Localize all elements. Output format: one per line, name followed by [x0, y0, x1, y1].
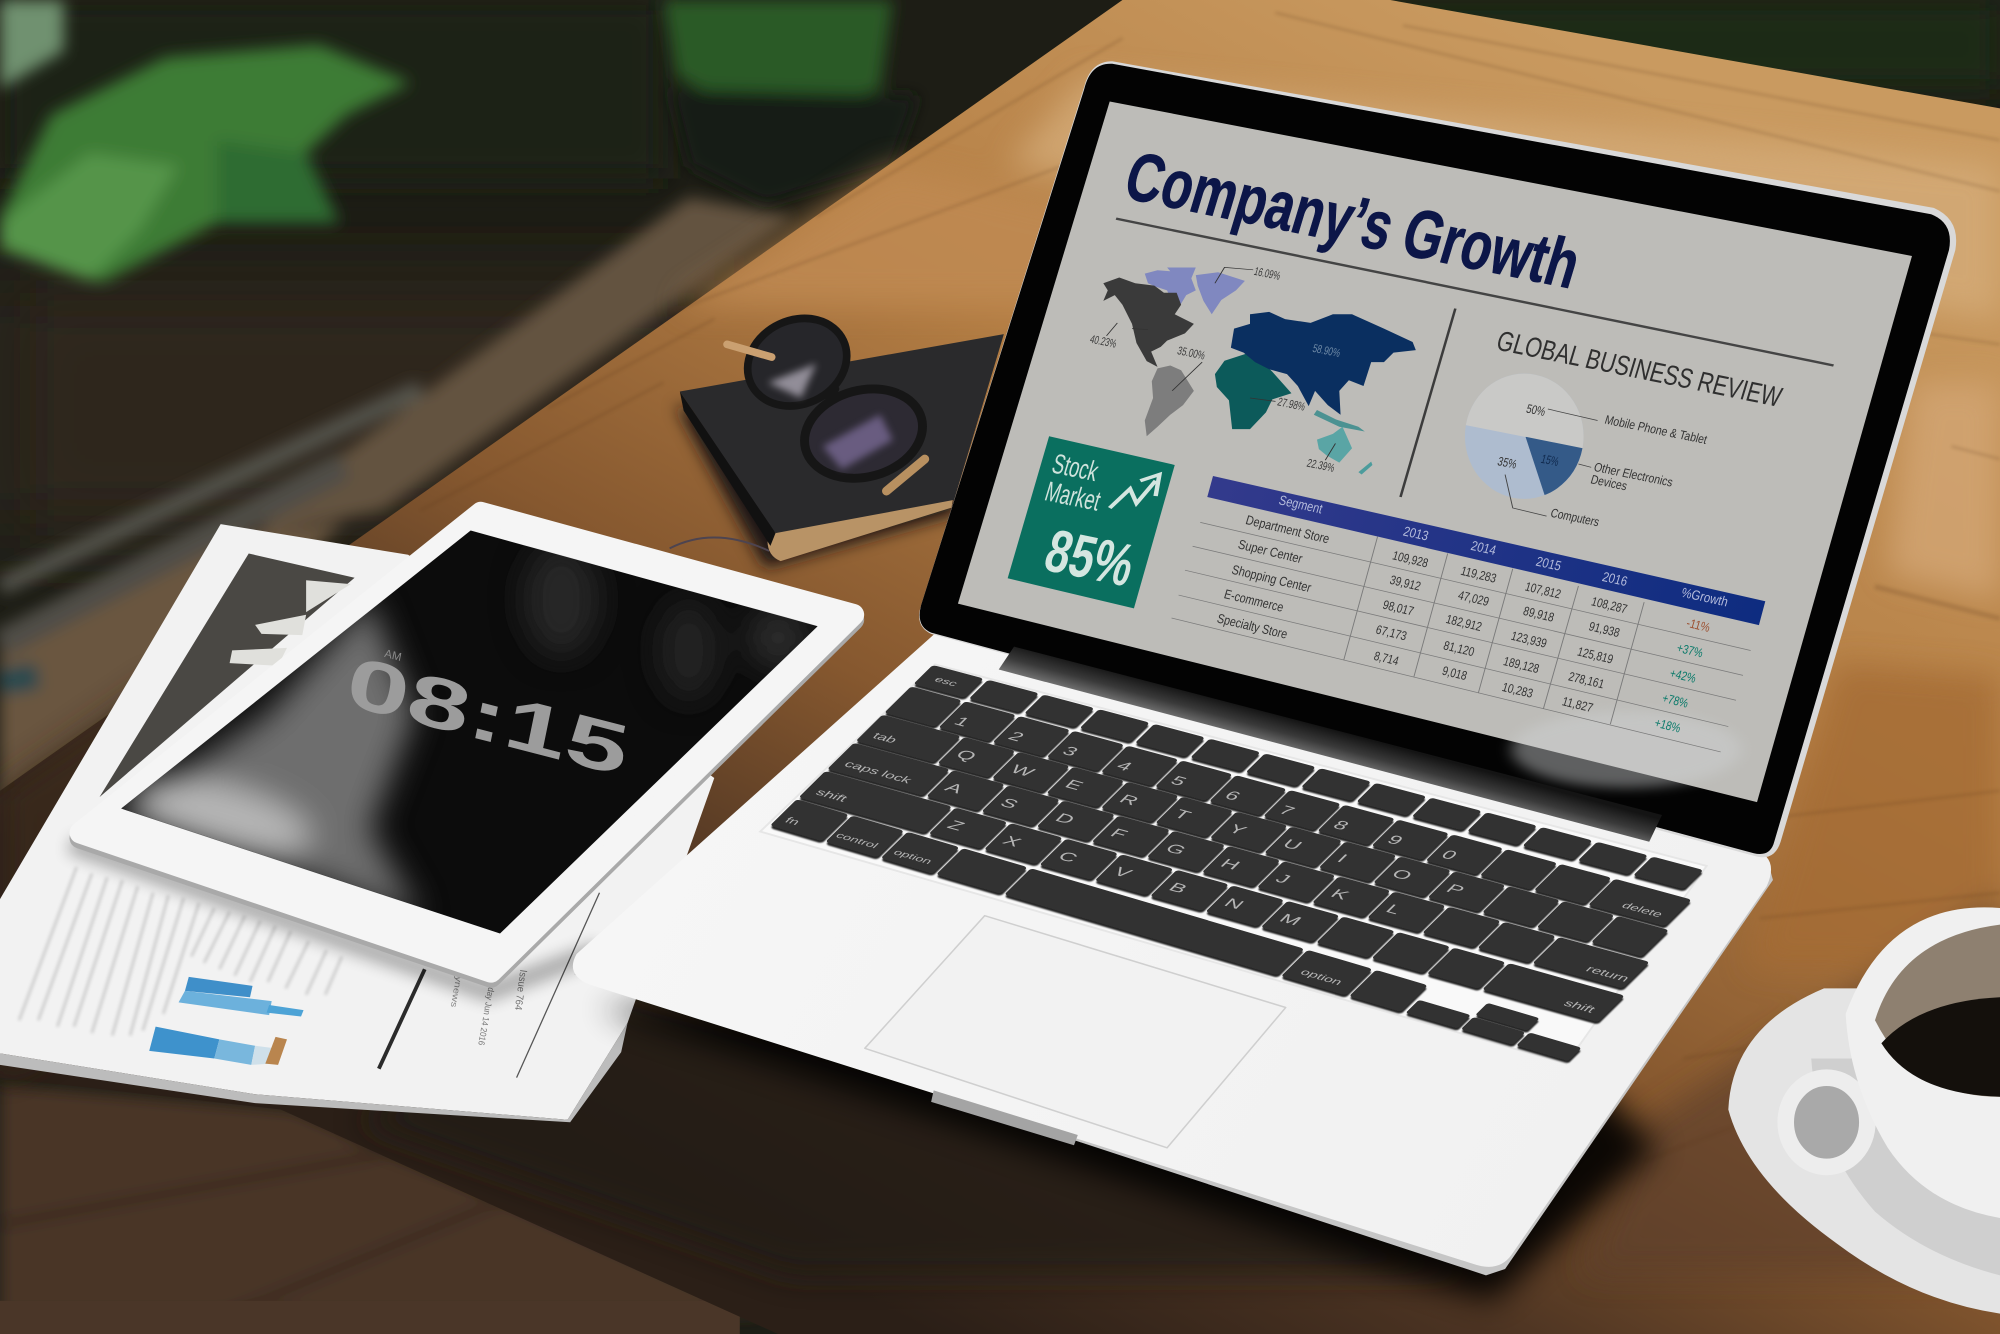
- pie chart: Devices: [1589, 473, 1629, 494]
- table values: 89,918: [1521, 605, 1556, 625]
- world map: 58.90%: [1311, 342, 1342, 360]
- pie chart: Mobile Phone & Tablet: [1603, 413, 1709, 447]
- pie chart: Computers: [1549, 507, 1601, 530]
- home key row: return: [1583, 963, 1633, 984]
- growth values: +37%: [1675, 641, 1705, 661]
- pie chart: 35%: [1496, 455, 1518, 472]
- trackpad: [865, 916, 1286, 1148]
- table values: 47,029: [1456, 589, 1491, 609]
- number key row: 0: [1438, 847, 1461, 862]
- home key row: A: [941, 780, 968, 796]
- title: Company’s Growth: [1117, 137, 1589, 303]
- laptop screen: [958, 101, 1912, 802]
- tablet: [70, 513, 853, 992]
- shift key row: B: [1165, 880, 1191, 896]
- qwerty key row: P: [1443, 881, 1469, 897]
- bottom key row: fn: [782, 815, 803, 827]
- table values: 91,938: [1587, 620, 1621, 640]
- world map: 16.09%: [1252, 265, 1282, 282]
- qwerty key row: R: [1116, 792, 1143, 808]
- home key row: H: [1217, 856, 1244, 872]
- number key row: 9: [1383, 832, 1407, 847]
- home key row: F: [1107, 826, 1132, 841]
- home key row: D: [1052, 810, 1079, 827]
- table header: Segment: [1277, 493, 1325, 517]
- tablet screen: [115, 531, 818, 934]
- row labels: Shopping Center: [1230, 563, 1313, 596]
- home key row: G: [1162, 841, 1190, 857]
- stone ledge: [0, 198, 793, 816]
- number key row: [884, 686, 1692, 926]
- divider: [1401, 309, 1455, 497]
- world map: [1089, 265, 1416, 475]
- qwerty key row: Y: [1225, 821, 1251, 837]
- shift key row: shift: [1561, 998, 1599, 1015]
- row labels: Department Store: [1244, 513, 1331, 547]
- shift key row: X: [999, 833, 1026, 849]
- home key row: [827, 743, 1650, 988]
- bottom key row: [770, 799, 1595, 1061]
- pie chart: [1465, 374, 1709, 530]
- world map: 35.00%: [1176, 344, 1207, 362]
- table values: 108,287: [1590, 595, 1629, 617]
- table values: 123,939: [1509, 630, 1548, 651]
- qwerty key row: Q: [952, 747, 981, 763]
- bottom key row: control: [833, 830, 881, 850]
- stock market panel: [1008, 436, 1175, 608]
- table header: 2015: [1534, 555, 1563, 574]
- cup handle: [1786, 1078, 1867, 1167]
- table values: 107,812: [1523, 580, 1562, 602]
- pie chart: 15%: [1539, 453, 1560, 469]
- row labels: Super Center: [1236, 537, 1304, 567]
- home key row: caps lock: [842, 758, 915, 785]
- growth values: -11%: [1685, 617, 1712, 635]
- table values: 125,819: [1576, 645, 1615, 667]
- growth values: +42%: [1668, 667, 1698, 686]
- qwerty key row: U: [1279, 836, 1306, 853]
- laptop hinge: [999, 647, 1662, 842]
- row labels: [1215, 513, 1331, 642]
- number key row: 8: [1329, 817, 1353, 833]
- clock time: 08:15: [340, 641, 636, 792]
- world map: 40.23%: [1089, 333, 1118, 350]
- laptop lid: [919, 61, 1956, 857]
- coffee cup and saucer: [1728, 907, 2000, 1314]
- table values: 98,017: [1381, 598, 1415, 619]
- news credit: dailynews: [449, 959, 467, 1009]
- data table: [1172, 476, 1765, 752]
- table values: 278,161: [1567, 670, 1606, 692]
- table values: 119,283: [1459, 564, 1498, 586]
- shift key row: V: [1110, 864, 1136, 880]
- qwerty key row: I: [1334, 851, 1352, 865]
- shift key row: M: [1276, 911, 1305, 928]
- title rule: [1116, 219, 1834, 365]
- qwerty key row: tab: [870, 731, 900, 745]
- saucer: [1728, 988, 2000, 1314]
- shift key row: N: [1221, 895, 1248, 912]
- number key row: 2: [1005, 729, 1028, 744]
- growth values: [1653, 617, 1712, 736]
- icon: rising arrow: [1110, 475, 1159, 508]
- table values: 39,912: [1388, 574, 1422, 594]
- stock market panel: 85%: [1038, 516, 1142, 599]
- pie chart: 50%: [1525, 402, 1547, 419]
- keyboard: [770, 665, 1703, 1061]
- table values: 9,018: [1440, 664, 1469, 684]
- glasses: [727, 302, 933, 491]
- newspapers: [0, 524, 714, 1122]
- issue line: Issue 764: [512, 969, 528, 1011]
- clock am label: AM: [383, 648, 402, 664]
- number key row: delete: [1619, 901, 1665, 919]
- world map: 22.39%: [1305, 456, 1336, 474]
- table values: 189,128: [1502, 655, 1541, 677]
- pie chart: Other Electronics: [1592, 461, 1674, 490]
- bar chart: [149, 977, 304, 1065]
- screen panel: [958, 101, 1912, 802]
- function key row: esc: [932, 675, 961, 688]
- qwerty key row: E: [1061, 777, 1087, 793]
- table values: 182,912: [1444, 613, 1483, 634]
- qwerty key row: O: [1388, 866, 1416, 883]
- date line: Monday Jun 14 2016: [476, 971, 499, 1046]
- bottom key row: option: [1298, 967, 1345, 987]
- growth values: +78%: [1660, 692, 1690, 711]
- table header: 2016: [1600, 570, 1629, 589]
- number key row: 3: [1059, 743, 1082, 759]
- number key row: 5: [1167, 773, 1191, 788]
- bottom key row: option: [891, 847, 935, 866]
- newspaper rule: [379, 969, 425, 1069]
- laptop base: [573, 631, 1773, 1275]
- stock market panel: Stock: [1049, 447, 1103, 487]
- laptop shadow: [599, 1008, 1658, 1301]
- home key row: L: [1382, 902, 1406, 917]
- world map: 27.98%: [1276, 395, 1307, 413]
- table header: [1207, 476, 1765, 625]
- laptop: [573, 61, 1956, 1301]
- home key row: S: [996, 795, 1023, 811]
- cup body: [1846, 907, 2000, 1218]
- row labels: Specialty Store: [1215, 611, 1289, 642]
- newspaper photo: [99, 553, 355, 797]
- number key row: 6: [1221, 788, 1245, 803]
- stock market panel: Market: [1042, 475, 1104, 517]
- keyboard well: [760, 664, 1707, 1064]
- shift key row: Z: [944, 818, 969, 833]
- growth values: +18%: [1653, 717, 1682, 736]
- foliage: [0, 0, 918, 283]
- qwerty key row: T: [1170, 807, 1195, 822]
- table header: %Growth: [1679, 586, 1730, 610]
- qwerty key row: [856, 715, 1669, 957]
- coffee: [1881, 997, 2000, 1097]
- shift key row: shift: [813, 787, 851, 804]
- home key row: J: [1272, 871, 1295, 886]
- table values: 109,928: [1391, 549, 1430, 571]
- table header: 2014: [1469, 539, 1498, 558]
- table values: 67,173: [1374, 623, 1408, 644]
- number key row: 7: [1275, 803, 1299, 818]
- table values: 8,714: [1372, 650, 1400, 669]
- shift key row: [799, 771, 1625, 1022]
- section heading: GLOBAL BUSINESS REVIEW: [1493, 324, 1786, 413]
- function key row: [913, 665, 1703, 889]
- table values: 11,827: [1560, 695, 1595, 716]
- wooden floor: [0, 1084, 765, 1314]
- shift key row: C: [1054, 849, 1082, 865]
- newspaper text: [19, 867, 342, 1036]
- row labels: E-commerce: [1222, 587, 1285, 615]
- cup interior: [1875, 925, 2000, 1097]
- notebook: [670, 334, 1004, 568]
- qwerty key row: W: [1007, 762, 1039, 779]
- table values: [1372, 549, 1629, 716]
- table values: 81,120: [1442, 639, 1476, 660]
- number key row: 1: [950, 714, 974, 729]
- table values: 10,283: [1500, 681, 1535, 701]
- table header: 2013: [1401, 524, 1430, 544]
- home key row: K: [1327, 886, 1354, 902]
- number key row: 4: [1113, 758, 1137, 774]
